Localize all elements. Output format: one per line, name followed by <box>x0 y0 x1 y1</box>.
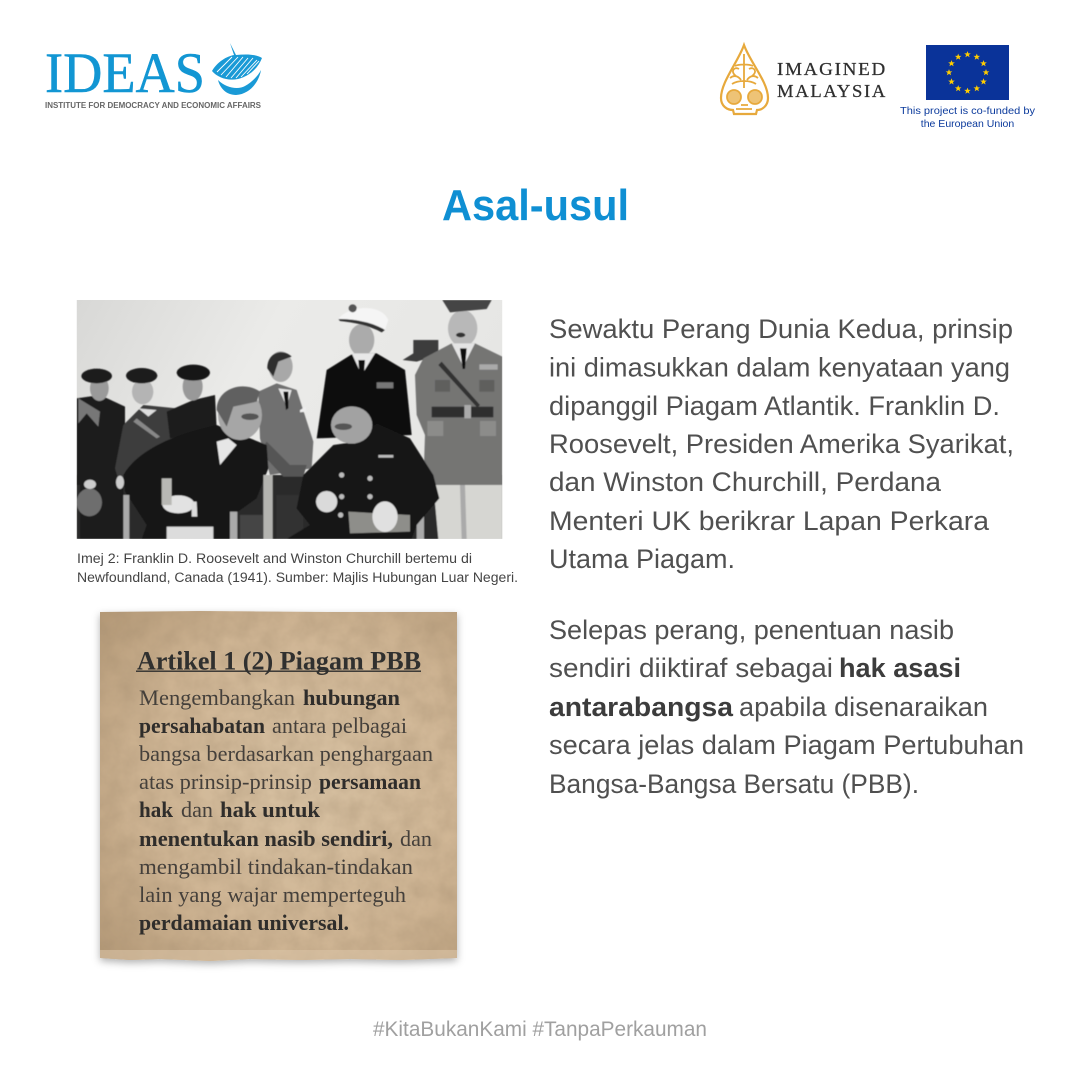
text block: post-war paragraph: sendiri diiktiraf sebagai <box>549 653 833 683</box>
Roosevelt <box>123 425 268 539</box>
navy admiral <box>317 353 412 438</box>
icon: EU flag <box>926 45 1009 100</box>
logo: EU flag and credit <box>900 45 1036 130</box>
logo: IDEAS <box>45 42 262 110</box>
IDEAS tagline: INSTITUTE FOR DEMOCRACY AND ECONOMIC AFFAIRS <box>45 101 262 110</box>
text block: post-war paragraph: apabila disenaraikan <box>739 692 988 722</box>
EU funding credit: This project is co-funded by <box>900 105 1036 117</box>
text block: Atlantic Charter paragraph: ini dimasukkan dalam kenyataan yang <box>549 352 1010 382</box>
hashtags: #KitaBukanKami #TanpaPerkauman <box>373 1018 707 1041</box>
text block: post-war paragraph: hak asasi <box>839 653 961 683</box>
paper body text: persamaan <box>319 769 421 794</box>
IDEAS wordmark: IDEAS <box>45 42 205 105</box>
general in uniform <box>415 343 502 485</box>
paper body text <box>139 685 433 935</box>
paper grain texture <box>100 611 457 961</box>
paper body text: lain yang wajar memperteguh <box>139 882 406 907</box>
text block: Atlantic Charter paragraph: Menteri UK berikrar Lapan Perkara <box>549 506 990 536</box>
left officers <box>77 395 125 485</box>
aged paper background <box>100 611 457 961</box>
text block: post-war paragraph: antarabangsa <box>549 692 734 722</box>
paper body text: hak <box>139 797 173 822</box>
paper heading: Artikel 1 (2) Piagam PBB <box>137 646 421 676</box>
EU funding credit <box>900 105 1036 130</box>
standing civilian <box>258 383 313 475</box>
paper body text: antara pelbagai <box>272 713 407 738</box>
EU funding credit: the European Union <box>921 118 1014 130</box>
hat behind general <box>403 340 438 362</box>
chairs and hat at left <box>80 482 123 539</box>
text block: Atlantic Charter paragraph: Roosevelt, Presiden Amerika Syarikat, <box>549 429 1014 459</box>
logo: Imagined Malaysia <box>721 45 887 114</box>
text block: Atlantic Charter paragraph: Utama Piagam. <box>549 544 735 574</box>
photo caption: Imej 2: Franklin D. Roosevelt and Winston Churchill bertemu di <box>77 551 472 566</box>
Churchill <box>287 423 439 539</box>
paper body text: hak untuk <box>220 797 320 822</box>
paper body text: dan <box>181 797 213 822</box>
paper body text: perdamaian universal. <box>139 910 349 935</box>
text block: post-war paragraph: Selepas perang, penentuan nasib <box>549 615 954 645</box>
paper body text: dan <box>400 826 432 851</box>
title: Asal-usul <box>442 181 629 230</box>
paper body text: menentukan nasib sendiri, <box>139 826 393 851</box>
paper body text: hubungan <box>303 685 400 710</box>
text block: Atlantic Charter paragraph: dipanggil Piagam Atlantik. Franklin D. <box>549 391 1000 421</box>
paper body text: bangsa berdasarkan penghargaan <box>139 741 433 766</box>
logo: Imagined Malaysia: MALAYSIA <box>777 81 887 101</box>
photo caption: Newfoundland, Canada (1941). Sumber: Majlis Hubungan Luar Negeri. <box>77 570 518 585</box>
Imagined Malaysia wordmark: IMAGINED <box>777 59 887 79</box>
text block: post-war paragraph <box>549 615 1024 799</box>
paper body text: persahabatan <box>139 713 265 738</box>
text block: Atlantic Charter paragraph: Sewaktu Perang Dunia Kedua, prinsip <box>549 314 1013 344</box>
icon: gold wayang kayon <box>721 45 768 114</box>
text block: post-war paragraph: secara jelas dalam Piagam Pertubuhan <box>549 730 1024 760</box>
photo caption <box>77 551 518 585</box>
text block: Atlantic Charter paragraph: dan Winston Churchill, Perdana <box>549 467 942 497</box>
paper body text: Mengembangkan <box>139 685 295 710</box>
panel: Artikel 1 (2) Piagam PBB paper <box>100 611 457 961</box>
paper body text: mengambil tindakan-tindakan <box>139 854 413 879</box>
icon: IDEAS bird <box>212 43 262 95</box>
text block: Atlantic Charter paragraph <box>549 314 1014 574</box>
photo: Roosevelt and Churchill at Newfoundland <box>77 300 502 539</box>
paper body text: atas prinsip-prinsip <box>139 769 312 794</box>
text block: post-war paragraph: Bangsa-Bangsa Bersatu (PBB). <box>549 769 919 799</box>
